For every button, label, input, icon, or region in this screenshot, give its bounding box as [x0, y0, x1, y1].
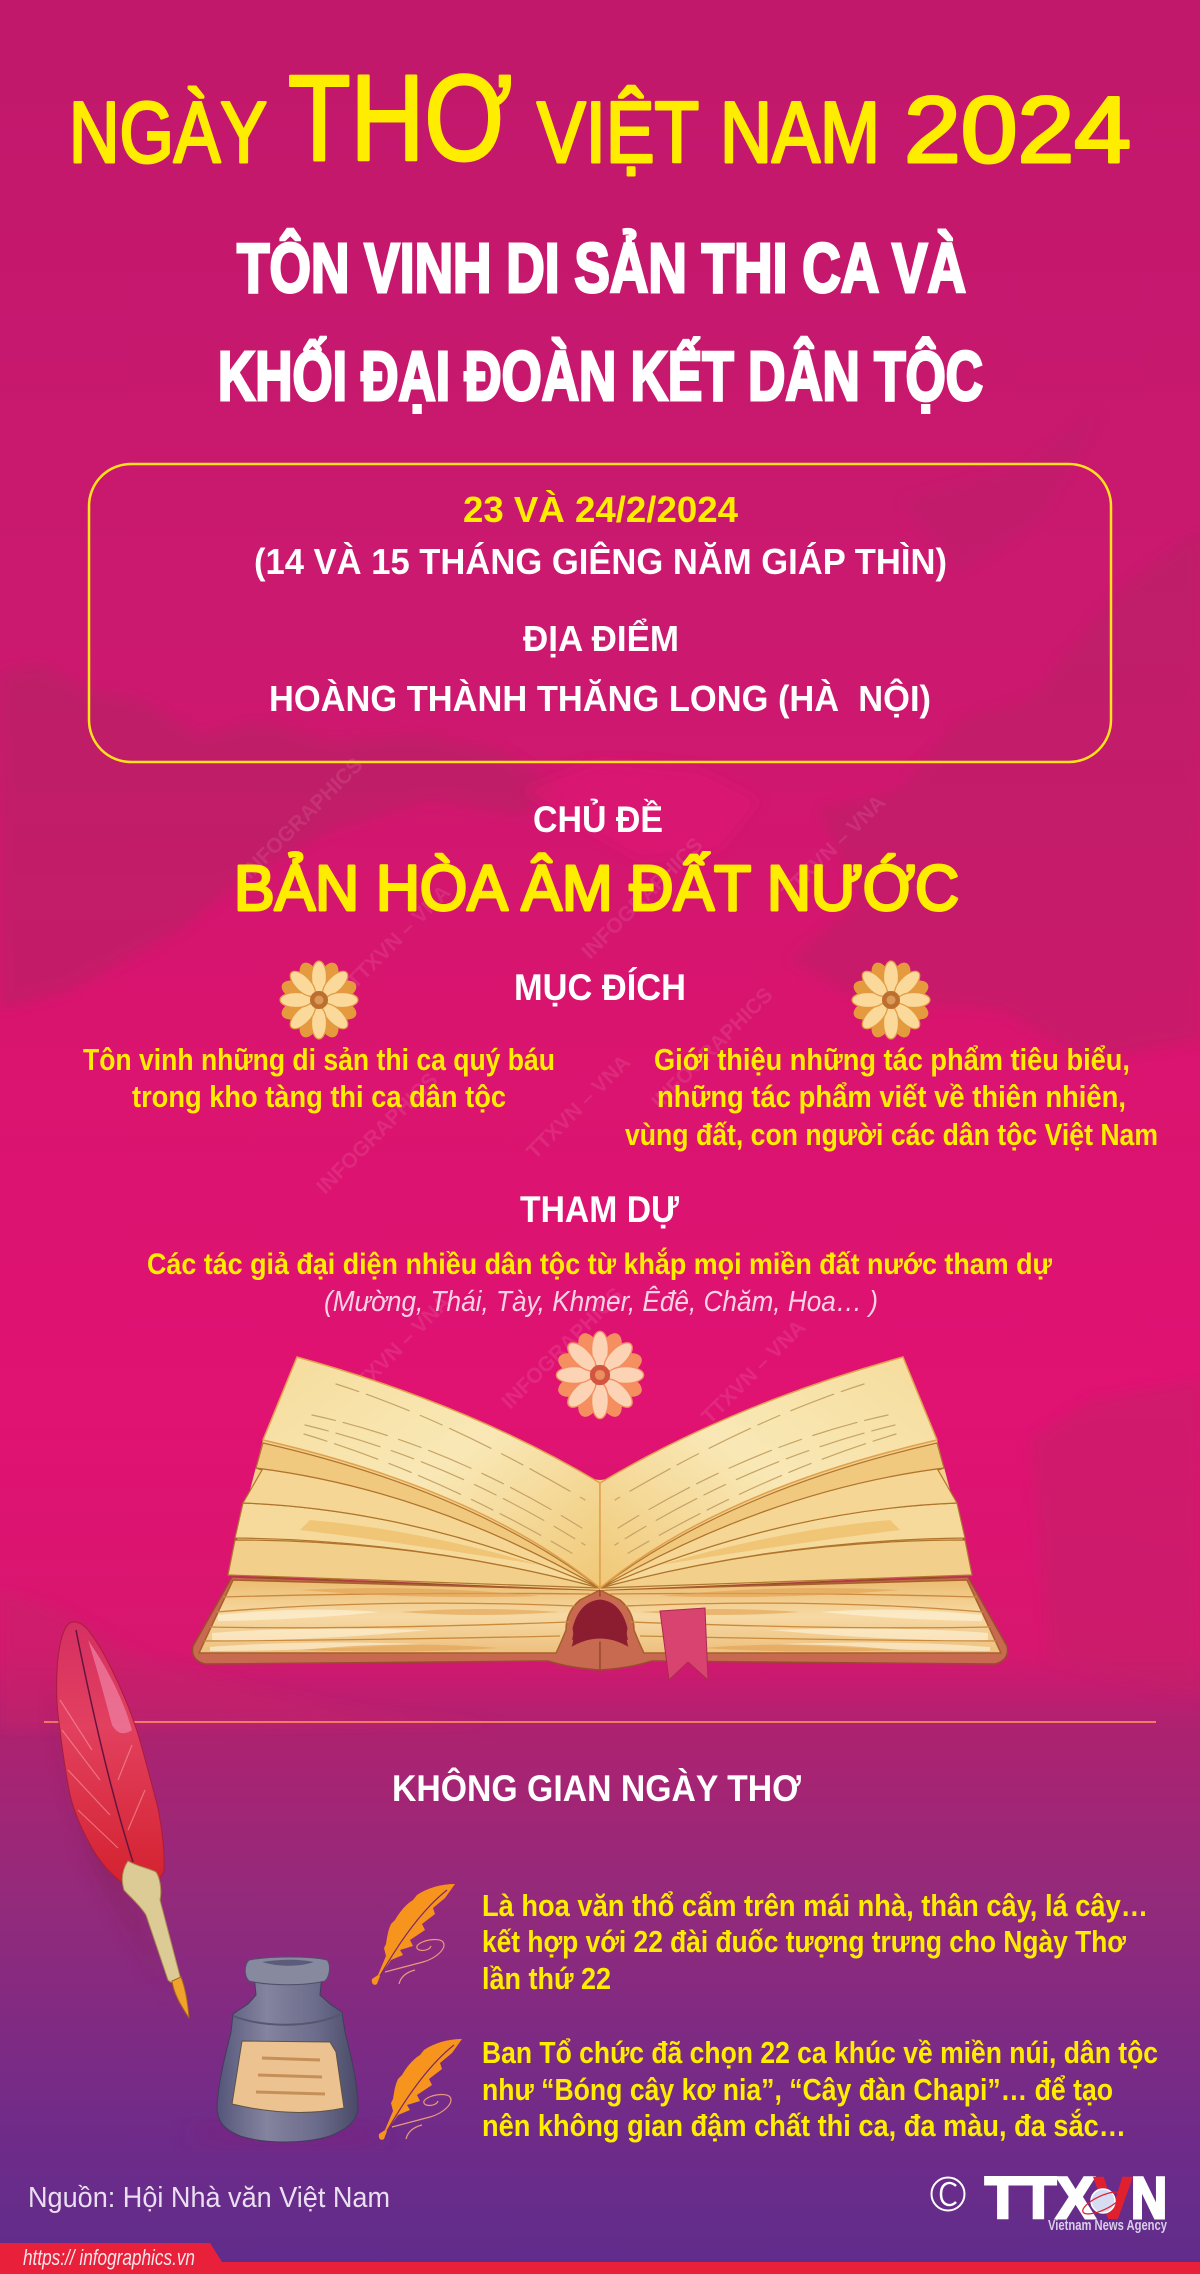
icon: flower left	[279, 960, 359, 1040]
title: THƠ	[288, 50, 512, 186]
theme heading: BẢN HÒA ÂM ĐẤT NƯỚC	[234, 851, 959, 924]
illustration: ink bottle	[188, 1957, 388, 2148]
divider	[44, 1721, 1156, 1723]
watermarks: TTXVN – VNA	[697, 1316, 810, 1429]
title: NGÀY	[69, 85, 267, 181]
text: participants: Các tác giả đại diện nhiều dân tộc từ khắp mọi miền đất nước tham dự	[147, 1247, 1052, 1281]
text: purpose right	[625, 1042, 1158, 1152]
quill nib	[172, 1977, 189, 2018]
text: ethnic groups: (Mường, Thái, Tày, Khmer, Êđê, Chăm, Hoa… )	[324, 1285, 878, 1318]
watermarks: TTXVN – VNA	[522, 1051, 635, 1164]
quill collar and stem	[122, 1861, 181, 1983]
title: VIỆT	[537, 85, 699, 181]
watermarks: INFOGRAPHICS	[497, 1283, 627, 1414]
icon: orange feather 2	[379, 2039, 462, 2140]
watermarks: TTXVN – VNA	[777, 791, 890, 904]
footer bar	[0, 2243, 1200, 2274]
watermarks: INFOGRAPHICS	[312, 1068, 442, 1199]
logo: TTXVN: Vietnam News Agency	[1048, 2218, 1167, 2234]
text block 1: lần thứ 22	[482, 1961, 611, 1996]
title: 2024	[904, 77, 1131, 182]
text: purpose right: Giới thiệu những tác phẩm tiêu biểu,	[654, 1042, 1130, 1077]
venue label: ĐỊA ĐIỂM	[523, 617, 679, 659]
heading: poetry day space: KHÔNG GIAN NGÀY THƠ	[392, 1767, 801, 1809]
watermarks: INFOGRAPHICS	[577, 833, 707, 964]
book arch	[560, 1598, 640, 1657]
watermarks: TTXVN – VNA	[342, 881, 455, 994]
heading: participants: THAM DỰ	[520, 1189, 679, 1230]
illustration: open book	[192, 1357, 1008, 1680]
bottle label	[232, 2041, 344, 2112]
icon: orange feather 1	[372, 1884, 455, 1985]
title	[69, 50, 1131, 186]
subtitle: TÔN VINH DI SẢN THI CA VÀ	[237, 228, 966, 307]
text block 2	[482, 2035, 1158, 2143]
text: purpose right: những tác phẩm viết về thiên nhiên,	[657, 1079, 1126, 1114]
logo: TTXVN: TTX	[985, 2166, 1095, 2231]
subtitle	[218, 228, 983, 415]
copyright mark	[932, 2178, 964, 2210]
text: purpose left: trong kho tàng thi ca dân tộc	[132, 1079, 506, 1114]
icon: flower right	[851, 960, 931, 1040]
icon: flower on book	[555, 1330, 645, 1420]
lunar date: (14 VÀ 15 THÁNG GIÊNG NĂM GIÁP THÌN)	[254, 540, 947, 582]
watermarks: TTXVN – VNA	[342, 1291, 455, 1404]
watermarks: INFOGRAPHICS	[647, 983, 777, 1114]
watermarks	[237, 753, 890, 1429]
logo: TTXVN: N	[1131, 2166, 1167, 2231]
text: purpose left	[83, 1042, 555, 1114]
illustration: red quill	[50, 1622, 189, 2018]
heading: purpose: MỤC ĐÍCH	[514, 967, 686, 1008]
logo: TTXVN: V	[1094, 2166, 1132, 2231]
text: purpose left: Tôn vinh những di sản thi ca quý báu	[83, 1042, 555, 1077]
date: 23 VÀ 24/2/2024	[463, 489, 738, 530]
title: NAM	[720, 85, 880, 181]
source: Nguồn: Hội Nhà văn Việt Nam	[28, 2182, 390, 2214]
logo: TTXVN	[932, 2166, 1167, 2234]
text block 1	[482, 1888, 1148, 1996]
website: https:// infographics.vn	[23, 2245, 195, 2270]
panel: date and venue	[89, 464, 1111, 762]
bookmark	[660, 1608, 708, 1680]
text block 2: nên không gian đậm chất thi ca, đa màu, đa sắc…	[482, 2107, 1126, 2143]
watermarks: INFOGRAPHICS	[237, 753, 367, 884]
venue: HOÀNG THÀNH THĂNG LONG (HÀ NỘI)	[269, 677, 931, 719]
text block 2: như “Bóng cây kơ nia”, “Cây đàn Chapi”… để tạo	[482, 2072, 1113, 2107]
theme label: CHỦ ĐỀ	[533, 798, 663, 840]
